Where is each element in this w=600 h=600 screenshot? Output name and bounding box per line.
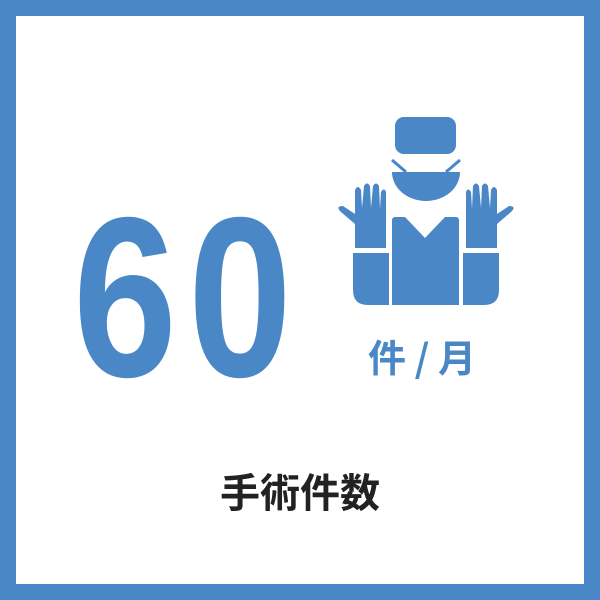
mask straps <box>392 160 460 172</box>
big number <box>73 171 292 425</box>
big number: 6 <box>73 171 177 425</box>
left glove <box>338 184 386 248</box>
right glove <box>466 184 514 248</box>
right sleeve <box>463 253 499 305</box>
unit label: 件 / 月 <box>368 328 476 383</box>
cap <box>395 117 456 154</box>
big number: 0 <box>188 171 292 425</box>
caption: 手術件数 <box>220 461 380 519</box>
mask <box>392 172 460 201</box>
body <box>392 217 459 305</box>
left sleeve <box>353 253 389 305</box>
